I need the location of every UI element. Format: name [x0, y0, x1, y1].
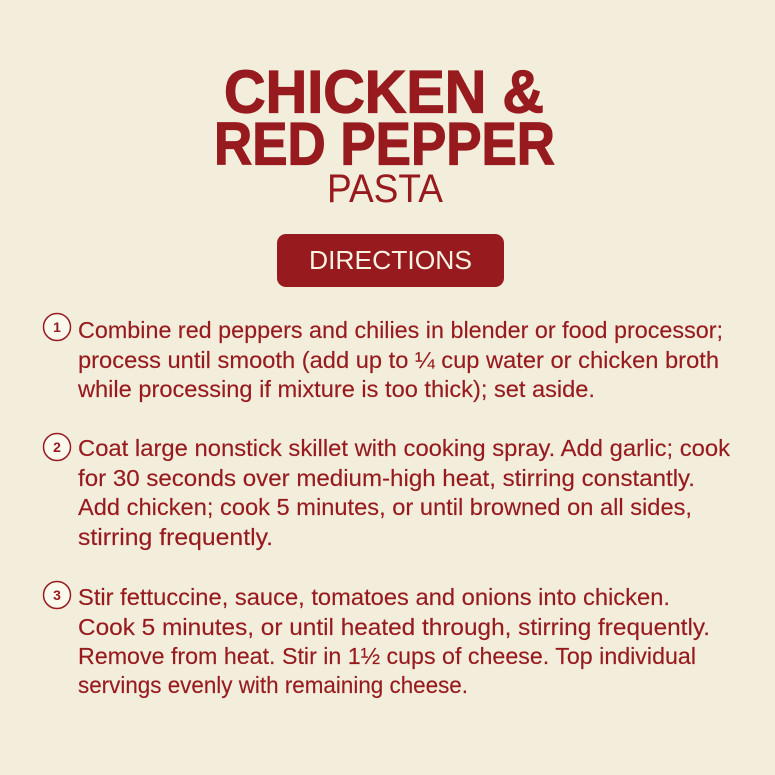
- step 3 text: [78, 584, 710, 698]
- step 2 text: Coat large nonstick skillet with cooking spray. Add garlic; cook: [78, 435, 730, 461]
- title: [214, 58, 555, 211]
- title: PASTA: [327, 167, 443, 211]
- step 2: [44, 434, 730, 550]
- step 3: [44, 582, 710, 698]
- step 1: [44, 314, 723, 402]
- step 1 text: [77, 317, 723, 402]
- step 2 number icon: [44, 434, 70, 460]
- step 2 text: stirring frequently.: [78, 524, 273, 550]
- directions badge: [277, 234, 504, 287]
- step 3 text: Cook 5 minutes, or until heated through, stirring frequently.: [78, 614, 710, 640]
- step 1 text: Combine red peppers and chilies in blender or food processor;: [78, 317, 723, 343]
- step 2 text: for 30 seconds over medium-high heat, stirring constantly.: [78, 465, 695, 491]
- step 1 text: while processing if mixture is too thick); set aside.: [77, 376, 595, 402]
- step 3 text: servings evenly with remaining cheese.: [78, 672, 468, 698]
- step 2 text: [78, 435, 730, 550]
- title: RED PEPPER: [214, 110, 555, 178]
- step 1 number icon: 1: [53, 319, 61, 335]
- step 3 text: Remove from heat. Stir in 1½ cups of cheese. Top individual: [78, 643, 696, 669]
- title: CHICKEN &: [224, 58, 544, 126]
- step 2 number icon: 2: [53, 439, 61, 455]
- step 2 text: Add chicken; cook 5 minutes, or until browned on all sides,: [78, 494, 692, 520]
- step 1 number icon: [44, 314, 70, 340]
- step 3 text: Stir fettuccine, sauce, tomatoes and onions into chicken.: [78, 584, 670, 610]
- step 1 text: process until smooth (add up to ¼ cup water or chicken broth: [78, 347, 719, 373]
- directions badge: DIRECTIONS: [309, 247, 472, 275]
- step 3 number icon: [44, 582, 70, 608]
- step 3 number icon: 3: [53, 587, 61, 603]
